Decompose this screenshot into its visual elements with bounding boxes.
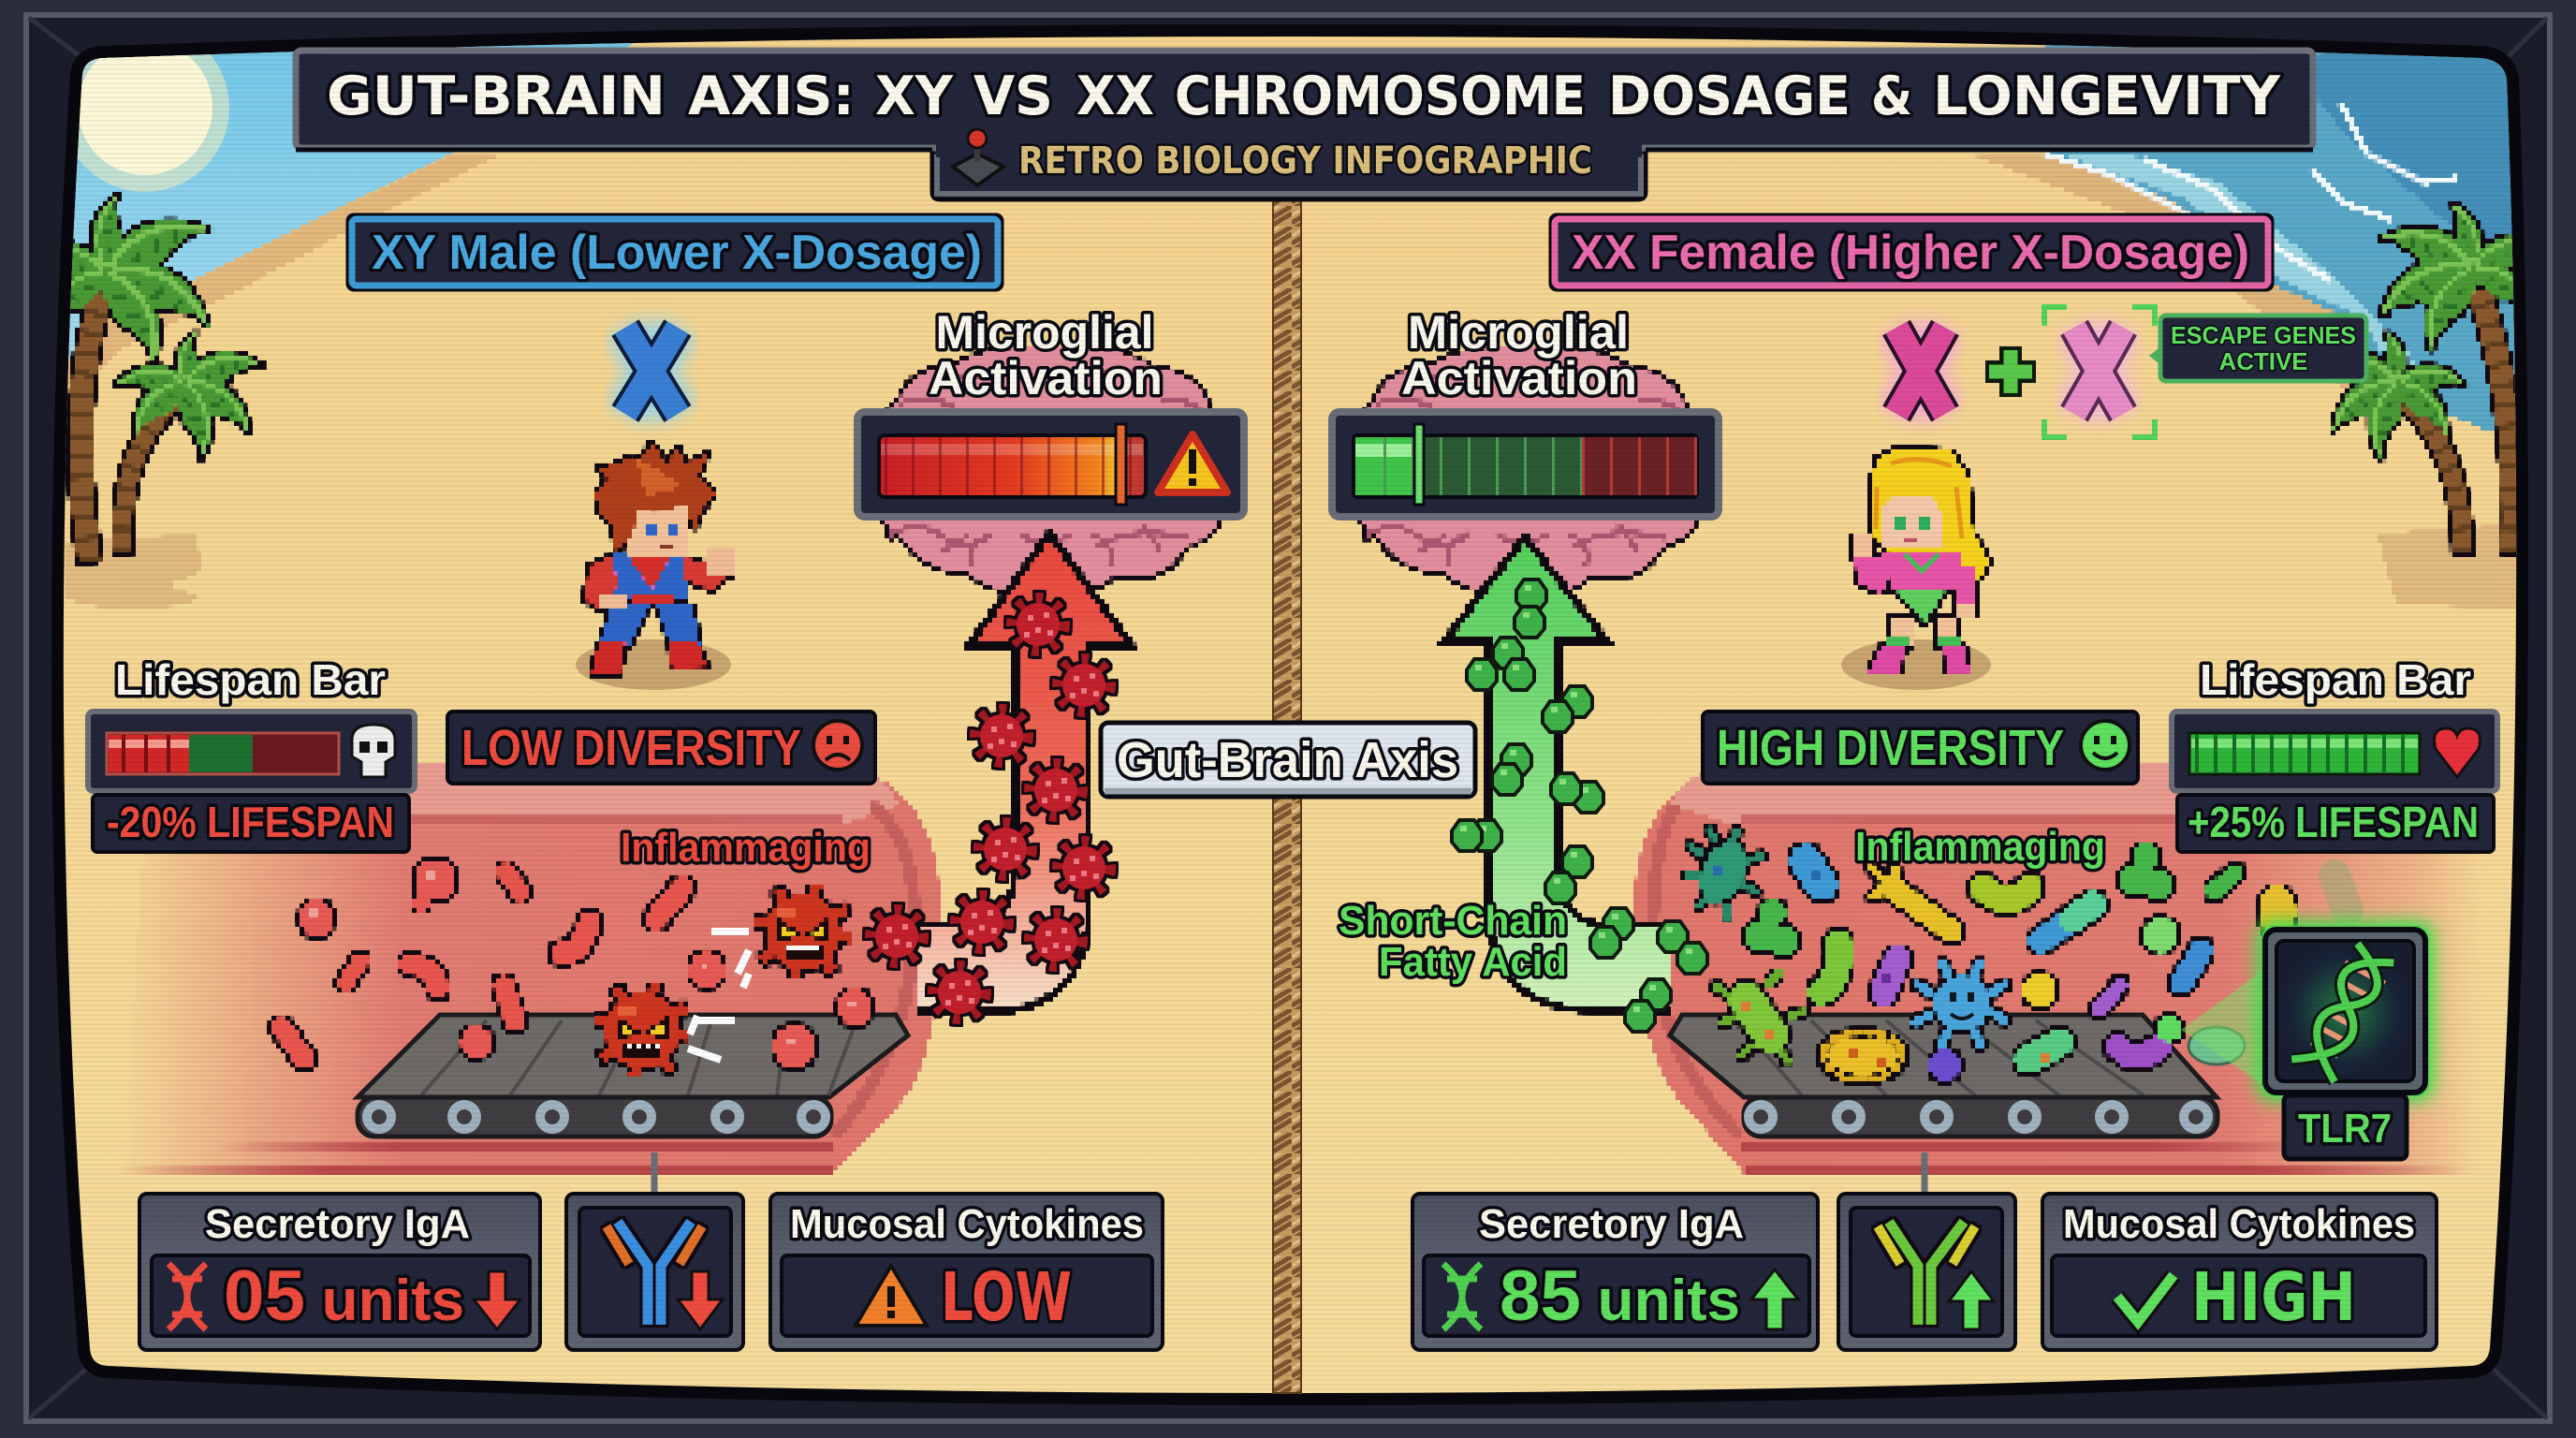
bottom panels: xx: [1412, 1194, 2437, 1350]
microglial label: [929, 306, 1163, 404]
secretory iga panel: [139, 1194, 540, 1350]
icon: antibody green: [1878, 1222, 1975, 1325]
wet sand right: [1975, 154, 2349, 389]
title text: XX: [1076, 66, 1154, 127]
character: xy male hero: [576, 443, 734, 690]
panel: [88, 712, 415, 791]
gauge panel: [857, 412, 1244, 517]
secretory iga panel: Secretory IgA: [1479, 1201, 1744, 1247]
icon: arrow up: [1751, 1269, 1798, 1329]
palm trees right: [2331, 201, 2516, 557]
sand dune edge left: [67, 154, 496, 403]
tlr7 dna panel: [2261, 926, 2429, 1096]
iga value: 85 units: [1500, 1256, 1740, 1336]
tlr7 sensor glow: [2256, 920, 2435, 1102]
rope divider: [1273, 197, 1301, 1393]
bad bacteria: left gut: [282, 859, 871, 1068]
cytokines value: LOW: [941, 1258, 1072, 1336]
mucosal cytokines panel: [2042, 1194, 2437, 1350]
red arrow: gut to brain, inflammatory: [872, 534, 1132, 1017]
header: xy male: [348, 215, 1002, 289]
icon: heart: [2434, 728, 2481, 777]
title text: AXIS:: [688, 66, 855, 127]
icon: dna green: [1443, 1264, 1481, 1329]
escape genes callout: ESCAPE GENES: [2171, 321, 2356, 349]
tlr7 beam: [2181, 969, 2265, 1086]
lifespan bar: left: [88, 655, 415, 852]
icon: arrow up: [1949, 1271, 1994, 1329]
subtitle text: RETRO BIOLOGY INFOGRAPHIC: [1018, 139, 1592, 183]
sun: [77, 54, 229, 192]
white impact sparks: [688, 932, 749, 1060]
palm tree shadows: [66, 524, 2518, 609]
microglial gauge: left: [857, 306, 1244, 517]
x chromosome: female one: [1896, 328, 1945, 414]
palm trees left: [66, 192, 267, 566]
title text: VS: [973, 66, 1053, 127]
subtitle tab: [932, 140, 1646, 199]
icon: check mark: [2117, 1275, 2174, 1322]
bottom panels: xy: [139, 1152, 1925, 1350]
inflammaging label left: Inflammaging: [621, 825, 871, 871]
icon: joystick: [953, 129, 1003, 185]
icon: dna red: [168, 1264, 206, 1329]
title text: &: [1871, 66, 1912, 127]
lifespan delta: -20% LIFESPAN: [107, 798, 394, 846]
brain: right: [1350, 347, 1704, 594]
lifespan label: Lifespan Bar: [2200, 655, 2471, 704]
sea: [2041, 45, 2516, 440]
plus sign fill: [1989, 350, 2032, 393]
smiling blue microbe face: [1950, 992, 1974, 1019]
title text: [327, 66, 2281, 127]
gut-brain axis label: Gut-Brain Axis: [1117, 732, 1458, 788]
gut tube: xy male: [115, 765, 941, 1174]
icon: warning: [856, 1266, 927, 1326]
gut tube: xx female: [1633, 765, 2481, 1174]
secretory iga panel: Secretory IgA: [205, 1201, 470, 1247]
short-chain fatty acid label: Fatty Acid: [1379, 939, 1567, 985]
secretory iga panel: [1412, 1194, 1818, 1350]
short-chain fatty acid label: [1339, 898, 1567, 985]
icon: warning triangle: [1158, 434, 1227, 492]
microglial label: Activation: [929, 352, 1163, 404]
lifespan bar: right: [2172, 655, 2497, 852]
iga value: 05 units: [224, 1256, 464, 1336]
angry virus bottom: [603, 991, 681, 1070]
conveyor belt: left: [358, 1015, 908, 1137]
gauge panel: [1332, 412, 1719, 517]
title text: CHROMOSOME: [1175, 66, 1586, 127]
title panel: [296, 51, 2313, 157]
title text: LONGEVITY: [1933, 66, 2281, 127]
lifespan delta: +25% LIFESPAN: [2188, 798, 2479, 846]
mucosal cytokines panel: Mucosal Cytokines: [790, 1201, 1144, 1247]
antibody panel: [1838, 1194, 2015, 1350]
microglial label: Microglial: [936, 306, 1153, 359]
x chromosome: male: [625, 328, 678, 414]
icon: antibody blue: [607, 1222, 702, 1325]
gauge bar low: [1354, 424, 1697, 505]
microglial gauge: right: [1332, 306, 1719, 517]
brain: left: [873, 347, 1227, 594]
microglial label: [1401, 306, 1637, 404]
x chromosome: female two with escape genes: [2044, 307, 2155, 437]
short-chain fatty acid label: Short-Chain: [1339, 898, 1567, 944]
mucosal cytokines panel: Mucosal Cytokines: [2063, 1201, 2415, 1247]
title text: GUT-BRAIN: [327, 66, 666, 127]
lifespan label: Lifespan Bar: [115, 655, 386, 704]
escape genes callout: ACTIVE: [2218, 347, 2308, 375]
faded bacteria near tlr7: [2188, 875, 2348, 1064]
icon: arrow down: [474, 1271, 520, 1329]
antibody panel: [566, 1194, 743, 1350]
character: xx female hero: [1841, 448, 1991, 690]
bar: [2189, 733, 2420, 774]
header: xx female: XX Female (Higher X-Dosage): [1572, 226, 2249, 280]
panel: [2172, 712, 2497, 791]
icon: arrow down: [678, 1271, 723, 1329]
scfa molecules on green arrow: [1450, 578, 1709, 1034]
inflammaging label right: Inflammaging: [1855, 824, 2105, 870]
good bacteria: right gut: [1686, 829, 2296, 1081]
virus particles on red arrow: [872, 600, 1108, 1017]
conveyor belt: right: [1670, 1015, 2217, 1137]
header: xx female: [1551, 215, 2272, 289]
tlr7 label: [2284, 1095, 2407, 1159]
escape genes callout: [2149, 315, 2366, 381]
high diversity badge: HIGH DIVERSITY: [1717, 720, 2064, 776]
low diversity badge: LOW DIVERSITY: [461, 720, 801, 776]
icon: skull: [352, 725, 395, 777]
green arrow: gut to brain, short-chain fatty acids: [1445, 537, 1709, 1034]
cytokines value: HIGH: [2191, 1258, 2356, 1336]
angry virus top: [764, 893, 842, 972]
gauge bar high: [879, 424, 1146, 505]
tlr7 label: TLR7: [2298, 1106, 2392, 1152]
title banner: [296, 51, 2313, 199]
mucosal cytokines panel: [770, 1194, 1163, 1350]
header: xy male: XY Male (Lower X-Dosage): [372, 226, 982, 280]
sky: [68, 43, 634, 361]
title text: DOSAGE: [1608, 66, 1851, 127]
microglial label: Activation: [1401, 352, 1637, 404]
plus sign: [1985, 346, 2036, 397]
microglial label: Microglial: [1408, 306, 1629, 359]
bar: [107, 733, 339, 774]
title text: XY: [875, 66, 954, 127]
check mark fill: [2117, 1275, 2174, 1322]
